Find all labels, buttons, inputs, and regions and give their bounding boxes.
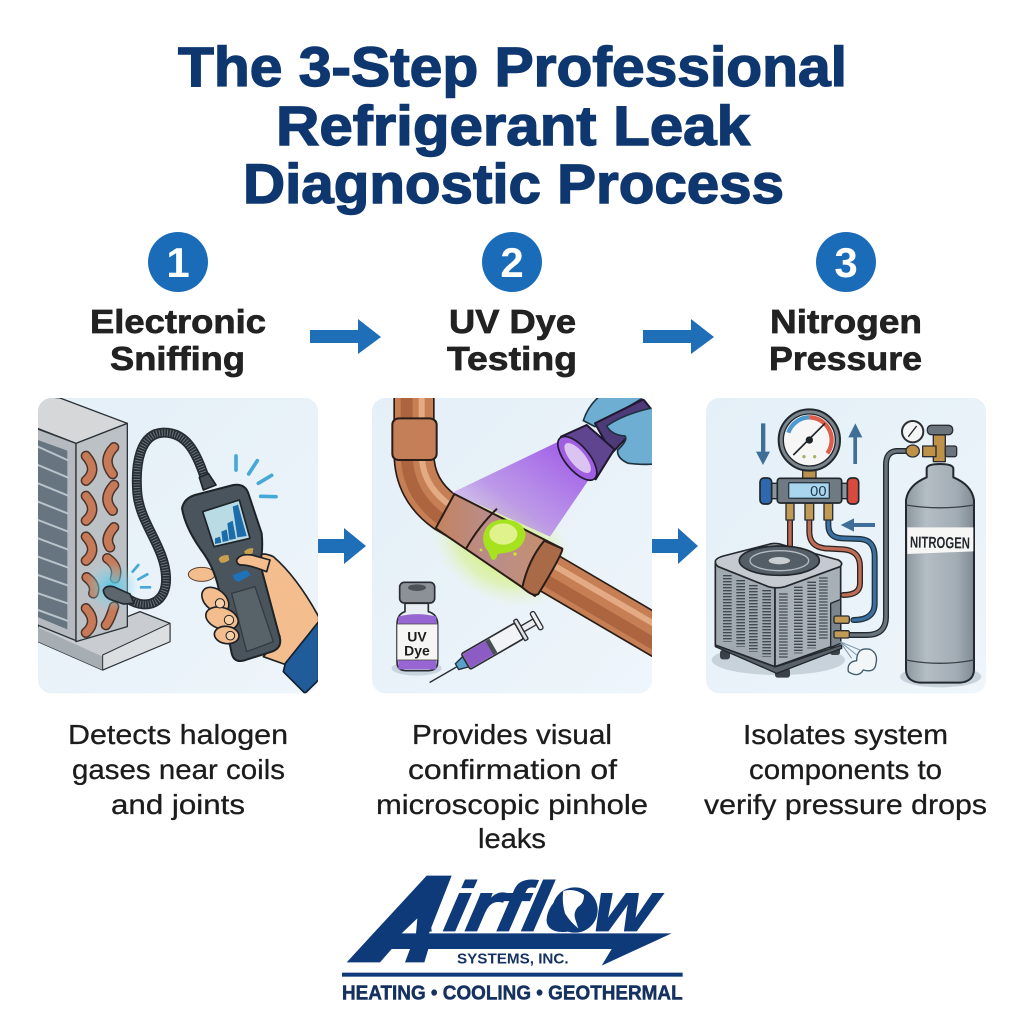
manifold with digital display: [760, 478, 859, 520]
hand fingers: [197, 555, 270, 645]
cylinder valve and small gauge: [902, 421, 957, 462]
gloved hand, front: [607, 407, 655, 464]
step 1 heading: Electronic: [90, 303, 266, 340]
UV dye vial: [392, 582, 442, 676]
description: UV dye testing: confirmation of: [408, 754, 617, 785]
step 2 heading: Testing: [447, 340, 577, 377]
step 2 heading: [447, 303, 577, 377]
description: nitrogen pressure: components to: [749, 754, 942, 785]
step 2 heading: UV Dye: [449, 303, 576, 340]
title: Refrigerant Leak: [276, 94, 751, 157]
glowing leak: [480, 519, 526, 560]
coil unit: [33, 395, 170, 670]
hand behind: [262, 553, 318, 665]
panel: UV dye testing illustration: [372, 398, 652, 694]
sensor tip: [103, 586, 134, 604]
title: [178, 35, 847, 215]
description: UV dye testing: Provides visual: [412, 719, 612, 750]
signal ticks: [236, 456, 276, 497]
description: nitrogen pressure: verify pressure drops: [704, 789, 987, 820]
condenser unit: [712, 544, 849, 678]
step 1 number badge: 1: [166, 239, 190, 286]
description: electronic sniffing: Detects halogen: [68, 719, 288, 750]
step 2 number badge: 2: [500, 239, 524, 286]
step 3 heading: Nitrogen: [770, 303, 922, 340]
description: electronic sniffing: [68, 719, 288, 820]
description: UV dye testing: microscopic pinhole: [376, 789, 648, 820]
detector body: [182, 473, 280, 661]
logo counter: [402, 918, 417, 933]
title: Diagnostic Process: [243, 152, 784, 215]
sensor hose: [130, 433, 205, 604]
arrow: step 2 to step 3: [643, 319, 714, 354]
step 1 heading: [90, 303, 266, 377]
UV beam: [452, 440, 589, 537]
logo wordmark: irflow: [440, 868, 669, 945]
logo subtitle: SYSTEMS, INC.: [457, 952, 569, 968]
description: electronic sniffing: and joints: [111, 789, 245, 820]
large pressure gauge: [779, 409, 840, 480]
nitrogen cylinder: [900, 464, 981, 687]
arrow: panel 1 to panel 2: [318, 528, 366, 564]
manifold with digital display: 00: [810, 484, 826, 500]
title: The 3-Step Professional: [178, 35, 847, 98]
logo rule: [342, 973, 683, 977]
arrow: panel 2 to panel 3: [652, 528, 698, 564]
coupling sleeve: [436, 494, 562, 596]
UV dye vial: UV: [407, 628, 427, 644]
leak glow and signal ticks: [85, 562, 150, 612]
logo tagline: HEATING • COOLING • GEOTHERMAL: [342, 981, 683, 1004]
description: nitrogen pressure: [704, 719, 987, 820]
description: electronic sniffing: gases near coils: [72, 754, 285, 785]
step 1 heading: Sniffing: [110, 340, 245, 377]
step 3 number badge: 3: [834, 239, 858, 286]
UV dye vial: Dye: [404, 642, 430, 658]
panel: electronic sniffing illustration: [33, 395, 319, 693]
panel: nitrogen pressure illustration: [706, 398, 986, 693]
index finger tip behind detector: [188, 567, 215, 581]
shirt cuff: [283, 622, 319, 693]
upper pipe collar: [392, 418, 437, 460]
leak puff: [840, 642, 877, 675]
nitrogen cylinder: NITROGEN: [910, 534, 970, 553]
logo letter A: A: [393, 882, 436, 945]
logo: Airflow Systems: [342, 868, 683, 1004]
copper hairpins: [86, 447, 116, 633]
direction arrows: [756, 423, 875, 532]
logo wing and arrow: [347, 876, 672, 966]
flashlight: [557, 398, 652, 482]
step 3 heading: [769, 303, 922, 377]
step 1 number badge: [148, 232, 208, 292]
description: UV dye testing: [376, 719, 648, 854]
copper pipe: [407, 393, 682, 660]
step 3 heading: Pressure: [769, 340, 922, 377]
green halo: [436, 499, 568, 603]
syringe: [429, 610, 544, 684]
arrow: step 1 to step 2: [310, 319, 381, 354]
logo globe: [552, 887, 598, 933]
gloved hand, rear: [583, 397, 645, 427]
service hoses: [790, 451, 908, 635]
description: nitrogen pressure: Isolates system: [743, 719, 948, 750]
step 2 number badge: [482, 232, 542, 292]
description: UV dye testing: leaks: [478, 823, 546, 854]
step 3 number badge: [816, 232, 876, 292]
